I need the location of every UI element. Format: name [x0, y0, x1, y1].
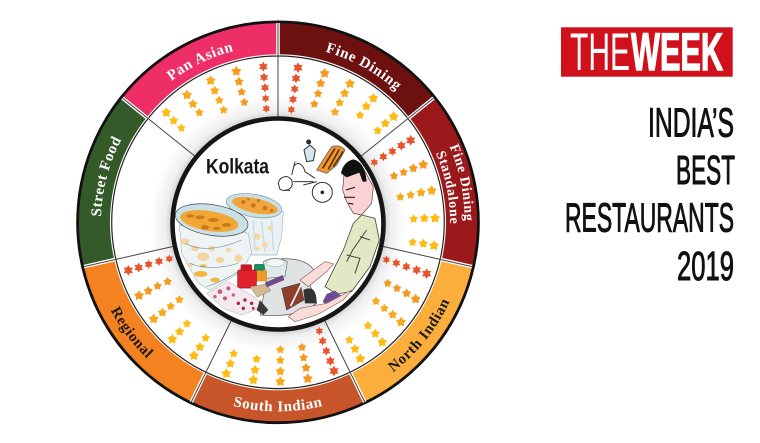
illustration: green and orange jar	[254, 264, 267, 281]
illustration: dark corner of tray	[257, 300, 268, 315]
label: Fine Dining Standalone: Fine Dining	[450, 143, 474, 221]
stars: Pan Asian	[161, 62, 270, 132]
label: Regional: Regional	[110, 306, 154, 358]
logo text: THE: THE	[570, 23, 630, 82]
illustration: left sack	[173, 199, 252, 290]
segment dividers	[84, 23, 472, 402]
centre circle	[172, 118, 384, 330]
illustration: glass jar	[263, 258, 287, 278]
soft shadow around centre circle	[150, 96, 406, 352]
stars: South Indian	[221, 327, 339, 386]
label: Fine Dining: Fine Dining	[326, 42, 401, 92]
segment: Pan Asian	[134, 39, 278, 108]
outer black ring	[78, 22, 478, 422]
illustration: cup with drink	[282, 283, 317, 310]
illustration: vendor arms	[288, 262, 352, 322]
label: South Indian: South Indian	[234, 397, 322, 412]
label: Street Food: Street Food	[91, 136, 122, 216]
label: Standalone line: Standalone	[436, 151, 458, 224]
thin inner ring	[112, 56, 444, 389]
illustration: steel tray	[260, 259, 317, 316]
stars: Fine Dining Standalone	[371, 135, 440, 250]
label: North Indian: North Indian	[387, 300, 450, 372]
illustration: vendor facial features	[344, 187, 355, 204]
segment: Fine Dining Standalone	[422, 108, 462, 263]
illustration: red jar	[238, 264, 256, 288]
segment: Fine Dining	[278, 39, 422, 108]
illustration: paper and purple packet	[250, 275, 284, 297]
restaurant wheel chart	[76, 20, 480, 424]
illustration: right sack	[224, 190, 284, 255]
illustration: vendor shirt	[325, 215, 379, 294]
segment: South Indian	[198, 388, 358, 406]
stars: North Indian	[345, 255, 431, 363]
illustration: vendor face	[343, 168, 373, 215]
title: India's Best Restaurants 2019	[565, 100, 735, 289]
segment: Regional	[99, 263, 198, 388]
illustration: onion and chilli mix	[207, 282, 264, 315]
stars: Regional	[124, 254, 210, 360]
city name: Kolkata: Kolkata	[206, 154, 270, 178]
illustration: vendor hair	[341, 159, 367, 182]
label: Pan Asian: Pan Asian	[166, 44, 234, 81]
logo: The Week	[561, 23, 733, 82]
illustration: vendor shirt details	[347, 230, 370, 273]
illustration: orange basket	[317, 146, 345, 173]
illustration: Kolkata street food vendor	[173, 140, 379, 322]
illustration: vendor trousers	[322, 290, 341, 304]
stars: Fine Dining	[288, 62, 399, 134]
segment: Street Food	[94, 108, 134, 263]
illustration: rickshaw	[278, 140, 332, 202]
segment: North Indian	[358, 263, 457, 388]
